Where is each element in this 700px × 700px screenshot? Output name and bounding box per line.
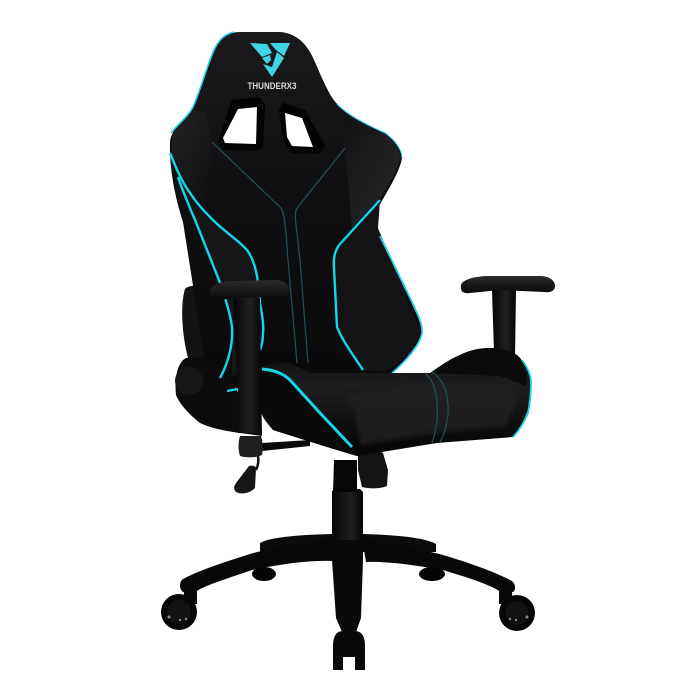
backrest shell [170, 32, 422, 400]
cyan piping right [334, 200, 380, 370]
left armrest back connection bar [262, 440, 310, 451]
right headrest opening [281, 105, 323, 152]
cyan piping left inner [178, 177, 232, 378]
right caster [499, 590, 535, 631]
logo wordmark: THUNDERX3 [248, 81, 296, 91]
logo mark [250, 43, 290, 77]
height adjustment sleeve [358, 451, 388, 488]
right armrest [461, 276, 555, 356]
left arm post [233, 298, 262, 433]
rear casters [252, 567, 445, 581]
lower right bolster [333, 200, 420, 372]
lower left bolster [178, 177, 262, 378]
left arm pad [210, 280, 290, 300]
front caster [333, 631, 365, 670]
gas cylinder [332, 489, 363, 540]
seat cushion [260, 348, 531, 456]
seat stitching [425, 372, 448, 443]
cyan edge top right [337, 104, 402, 158]
recline mechanism and lumbar side cushion [175, 286, 262, 436]
backrest [170, 32, 422, 400]
left headrest opening [220, 99, 263, 149]
centre stitching left [212, 142, 297, 363]
left seat wing [260, 368, 357, 456]
cyan edge top left [171, 32, 234, 133]
seat [260, 348, 531, 456]
left bolster panel [172, 110, 212, 205]
front leg [332, 536, 363, 632]
cyan piping lower [227, 389, 238, 391]
star base [161, 460, 535, 670]
recline lever handle [234, 466, 256, 493]
right arm post [492, 290, 516, 356]
seat cyan edge [513, 360, 531, 437]
left caster [161, 590, 197, 630]
recline knob [175, 367, 203, 395]
right bolster panel [345, 118, 400, 228]
side cushion [182, 286, 218, 375]
left leg [180, 538, 333, 593]
right seat wing highlight [431, 348, 527, 386]
cyan piping left outer [170, 153, 263, 350]
recline lever [256, 456, 258, 470]
seat cushion highlight [345, 382, 518, 445]
recline bracket [175, 356, 262, 436]
right arm pad [461, 276, 555, 293]
cyan edge lower right [380, 236, 422, 373]
centre stitching right [295, 148, 345, 363]
left armrest [210, 280, 290, 493]
rear base legs [260, 534, 436, 552]
left arm lower sleeve [238, 436, 263, 457]
seat cyan piping [262, 369, 352, 447]
right leg [362, 538, 515, 593]
